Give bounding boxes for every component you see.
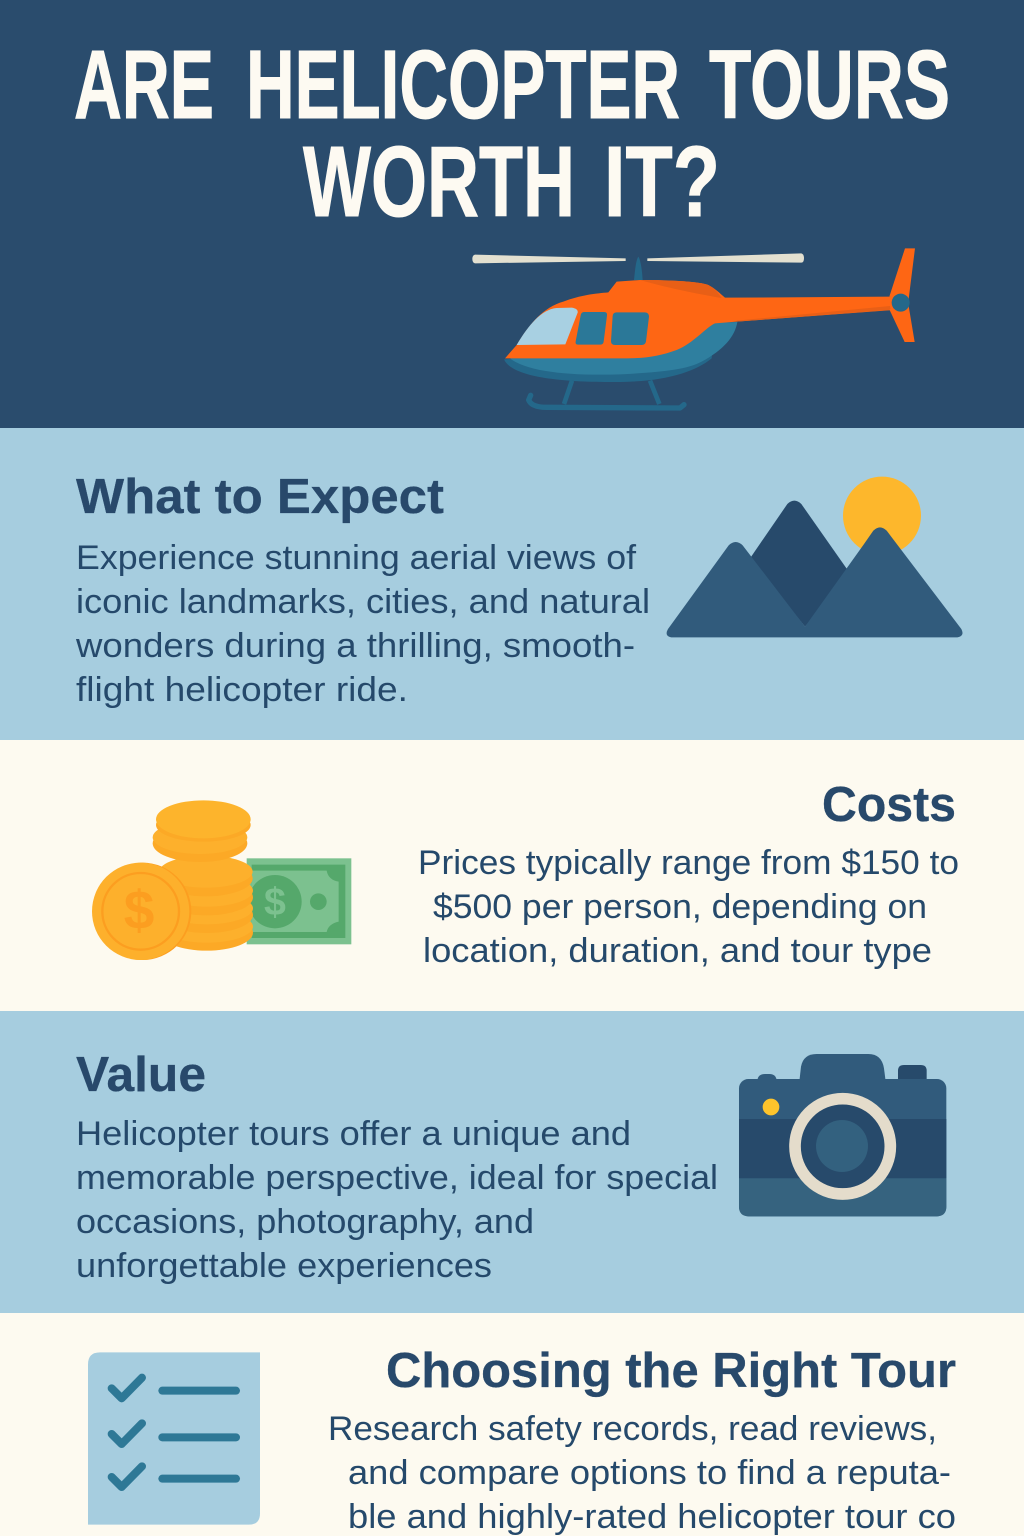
title: WORTH: [303, 126, 575, 238]
text: value description: Helicopter tours offer a unique and: [76, 1115, 631, 1153]
icon: mountains and sun: [667, 477, 963, 637]
heading: choosing the right tour: Choosing the Right Tour: [386, 1344, 956, 1398]
text: value description: [76, 1115, 718, 1285]
heading: costs: Costs: [822, 778, 956, 832]
icon: coins and banknote: [92, 800, 351, 960]
icon: camera: [739, 1054, 946, 1216]
icon: coins and banknote: $: [124, 879, 154, 941]
panel: costs: [0, 740, 1024, 1011]
title: ARE: [74, 30, 214, 139]
text: what to expect description: Experience stunning aerial views of: [76, 539, 637, 577]
text: what to expect description: [75, 539, 650, 709]
text: what to expect description: iconic landmarks, cities, and natural: [76, 583, 650, 621]
panel: header: [0, 0, 1024, 428]
text: what to expect description: wonders during a thrilling, smooth-: [75, 627, 635, 665]
text: choosing description: and compare options to find a reputa-: [348, 1454, 951, 1492]
panel: value: [0, 1011, 1024, 1313]
icon: coins and banknote: $: [264, 880, 286, 924]
panel: what to expect: [0, 428, 1024, 740]
text: choosing description: Research safety records, read reviews,: [328, 1410, 937, 1448]
text: value description: unforgettable experiences: [76, 1247, 492, 1285]
text: costs description: $500 per person, depending on: [433, 888, 927, 926]
text: value description: occasions, photography, and: [76, 1203, 534, 1241]
title: [74, 30, 950, 238]
text: costs description: [418, 844, 959, 970]
text: costs description: location, duration, and tour type: [423, 932, 932, 970]
title: IT?: [604, 126, 720, 238]
icon: helicopter: [472, 248, 915, 408]
text: what to expect description: flight helicopter ride.: [76, 671, 408, 709]
panel: choosing the right tour: [0, 1313, 1024, 1536]
text: costs description: Prices typically range from $150 to: [418, 844, 959, 882]
text: choosing description: [328, 1410, 956, 1536]
text: value description: memorable perspective, ideal for special: [76, 1159, 718, 1197]
heading: value: Value: [76, 1048, 206, 1102]
text: choosing description: ble and highly-rated helicopter tour co: [348, 1498, 956, 1536]
icon: checklist: [88, 1352, 260, 1525]
title: HELICOPTER: [246, 30, 680, 139]
heading: what to expect: What to Expect: [76, 470, 444, 524]
